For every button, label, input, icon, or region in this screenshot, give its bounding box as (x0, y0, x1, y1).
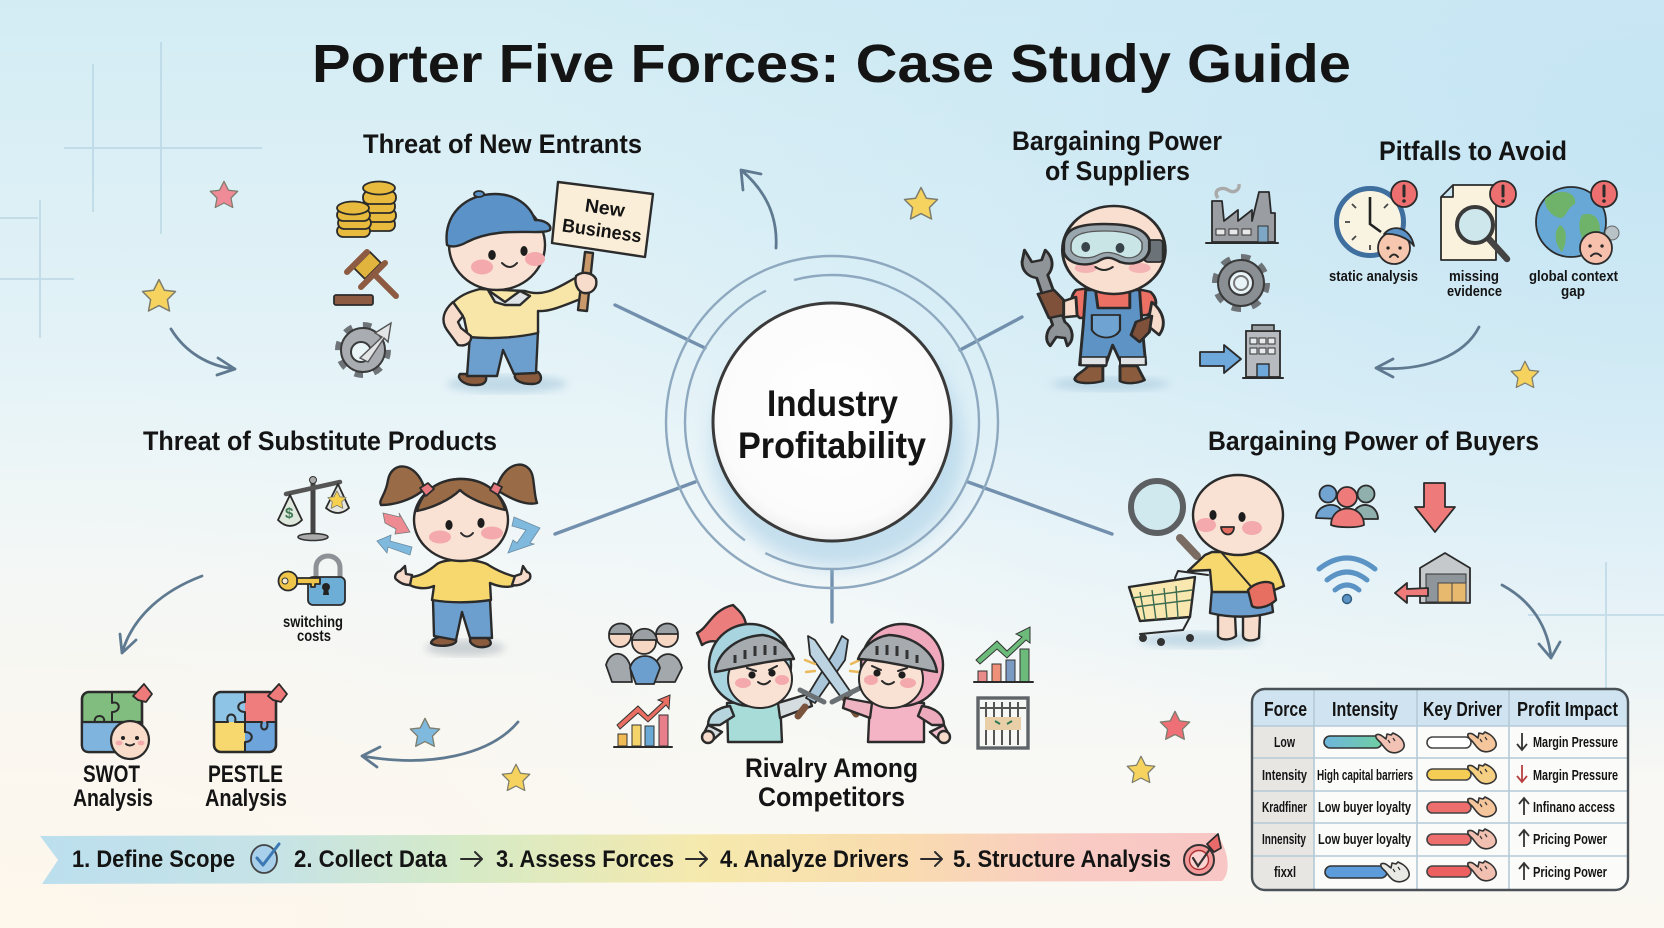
row 2 (1262, 764, 1618, 784)
icon: balance scale: $ (285, 505, 294, 522)
character: shopper with magnifier and cart (1129, 475, 1284, 648)
icon: pink knight (843, 624, 950, 743)
arrow (686, 852, 707, 866)
process ribbon (40, 833, 1228, 884)
step 5: 5. Structure Analysis (953, 846, 1171, 873)
spokes connecting forces to the center (555, 305, 1112, 622)
title: Porter Five Forces: Case Study Guide (312, 34, 1351, 94)
step 3: 3. Assess Forces (496, 846, 674, 873)
table header (1264, 699, 1618, 721)
panel: threat of new entrants (334, 129, 653, 393)
heading: bargaining power of suppliers: Bargaining Power (1012, 126, 1222, 156)
panel: complementary frameworks (73, 684, 287, 812)
icon: gear with arrow (339, 323, 391, 374)
icon: blue knight (697, 605, 812, 743)
shopping cart (1129, 571, 1208, 646)
row 1: Margin Pressure (1533, 735, 1618, 751)
pitfall: missing evidence (1441, 181, 1516, 300)
heading: bargaining power of suppliers (1012, 126, 1222, 186)
label: switching costs (283, 614, 343, 645)
row 1: Low (1274, 735, 1296, 751)
step 4: 4. Analyze Drivers (720, 846, 909, 873)
panel: pitfalls to avoid (1329, 136, 1619, 300)
panel: rivalry among competitors (606, 605, 1033, 812)
center label: Industry (767, 383, 898, 424)
icon: green rising chart (974, 627, 1033, 682)
panel: bargaining power of buyers (1129, 426, 1539, 648)
pitfall: static analysis (1329, 181, 1418, 285)
row 4: Low buyer loyalty (1318, 832, 1411, 848)
arrow (461, 852, 482, 866)
row 3: Kradfiner (1262, 800, 1307, 816)
icon: coin stacks (337, 182, 396, 237)
sign: New (584, 196, 626, 222)
row 5 (1274, 861, 1607, 882)
icon: gavel (334, 252, 396, 305)
sign (552, 182, 653, 257)
decorative stars (142, 181, 1539, 790)
row 4: Innensity (1262, 832, 1306, 848)
icon: check badge (251, 844, 279, 873)
table: force summary (1252, 689, 1628, 890)
icon: red down arrow (1415, 483, 1455, 532)
label: PESTLE analysis: PESTLE (208, 761, 283, 788)
icon: target check (1184, 834, 1221, 875)
icon: balance scale (278, 476, 349, 540)
icon: competitor crowd (606, 624, 682, 684)
pitfall: static analysis: static analysis (1329, 268, 1418, 285)
icon: cage barrier (978, 698, 1028, 748)
heading: bargaining power of buyers: Bargaining Power of Buyers (1208, 426, 1539, 456)
heading: rivalry among competitors: Competitors (758, 782, 905, 812)
SWOT puzzle (82, 684, 152, 759)
pitfall: global context gap (1529, 181, 1619, 300)
step 2: 2. Collect Data (294, 846, 448, 873)
row 3: Infinano access (1533, 800, 1615, 816)
heading: rivalry among competitors: Rivalry Among (745, 753, 918, 783)
panel: threat of substitute products (143, 426, 540, 656)
icon: warehouse with arrow (1395, 553, 1470, 603)
icon: buyers group (1316, 486, 1378, 527)
row 5: fixxl (1274, 865, 1296, 881)
icon: factory (1206, 184, 1278, 243)
row 5: Pricing Power (1533, 865, 1607, 881)
heading: threat of substitute products: Threat of Substitute Products (143, 426, 497, 456)
row 4: Pricing Power (1533, 832, 1607, 848)
label: SWOT analysis: Analysis (73, 785, 153, 812)
label: PESTLE analysis: Analysis (205, 785, 287, 812)
table header: Force (1264, 699, 1307, 721)
table header: Key Driver (1423, 699, 1502, 721)
icon: crossed swords (798, 636, 860, 716)
icon: wifi signal (1319, 558, 1375, 604)
label: switching costs: switching (283, 614, 343, 631)
row 2: High capital barriers (1317, 768, 1413, 784)
heading: rivalry among competitors (745, 753, 918, 812)
character: girl weighing substitutes (377, 465, 540, 656)
character: supplier worker (1022, 206, 1169, 391)
label: SWOT analysis (73, 761, 153, 812)
label: PESTLE analysis (205, 761, 287, 812)
table header: Intensity (1332, 699, 1399, 721)
row 3 (1262, 797, 1615, 817)
heading: pitfalls to avoid: Pitfalls to Avoid (1379, 136, 1567, 166)
PESTLE puzzle (214, 684, 287, 752)
pitfall: missing evidence: evidence (1447, 283, 1502, 300)
icon: red rising chart (614, 695, 672, 747)
row 4 (1262, 829, 1607, 849)
row 3: Low buyer loyalty (1318, 800, 1411, 816)
label: switching costs: costs (297, 628, 331, 645)
pitfall: global context gap: global context (1529, 268, 1618, 285)
label: SWOT analysis: SWOT (83, 761, 140, 788)
curved flow arrows (120, 170, 1560, 767)
icon: key and lock (278, 556, 345, 605)
step 1: 1. Define Scope (72, 846, 235, 873)
row 2: Intensity (1262, 768, 1307, 784)
icon: swirl arrows (377, 513, 540, 555)
row 1 (1274, 732, 1618, 753)
center label (738, 383, 926, 466)
center label: Profitability (738, 425, 926, 466)
heading: threat of new entrants: Threat of New Entrants (363, 129, 642, 159)
panel: bargaining power of suppliers (1012, 126, 1283, 391)
icon: arrow to building (1200, 325, 1283, 378)
pitfall: missing evidence: missing (1449, 268, 1499, 285)
row 2: Margin Pressure (1533, 768, 1618, 784)
pitfall: global context gap: gap (1561, 283, 1585, 300)
icon: gear (1216, 258, 1266, 308)
sign: Business (561, 216, 643, 247)
table header: Profit Impact (1517, 699, 1618, 721)
heading: bargaining power of suppliers: of Suppliers (1045, 156, 1190, 186)
center: industry profitability (666, 256, 998, 588)
arrow (921, 852, 942, 866)
character: entrant with sign (443, 182, 653, 393)
wrench (1022, 250, 1072, 346)
